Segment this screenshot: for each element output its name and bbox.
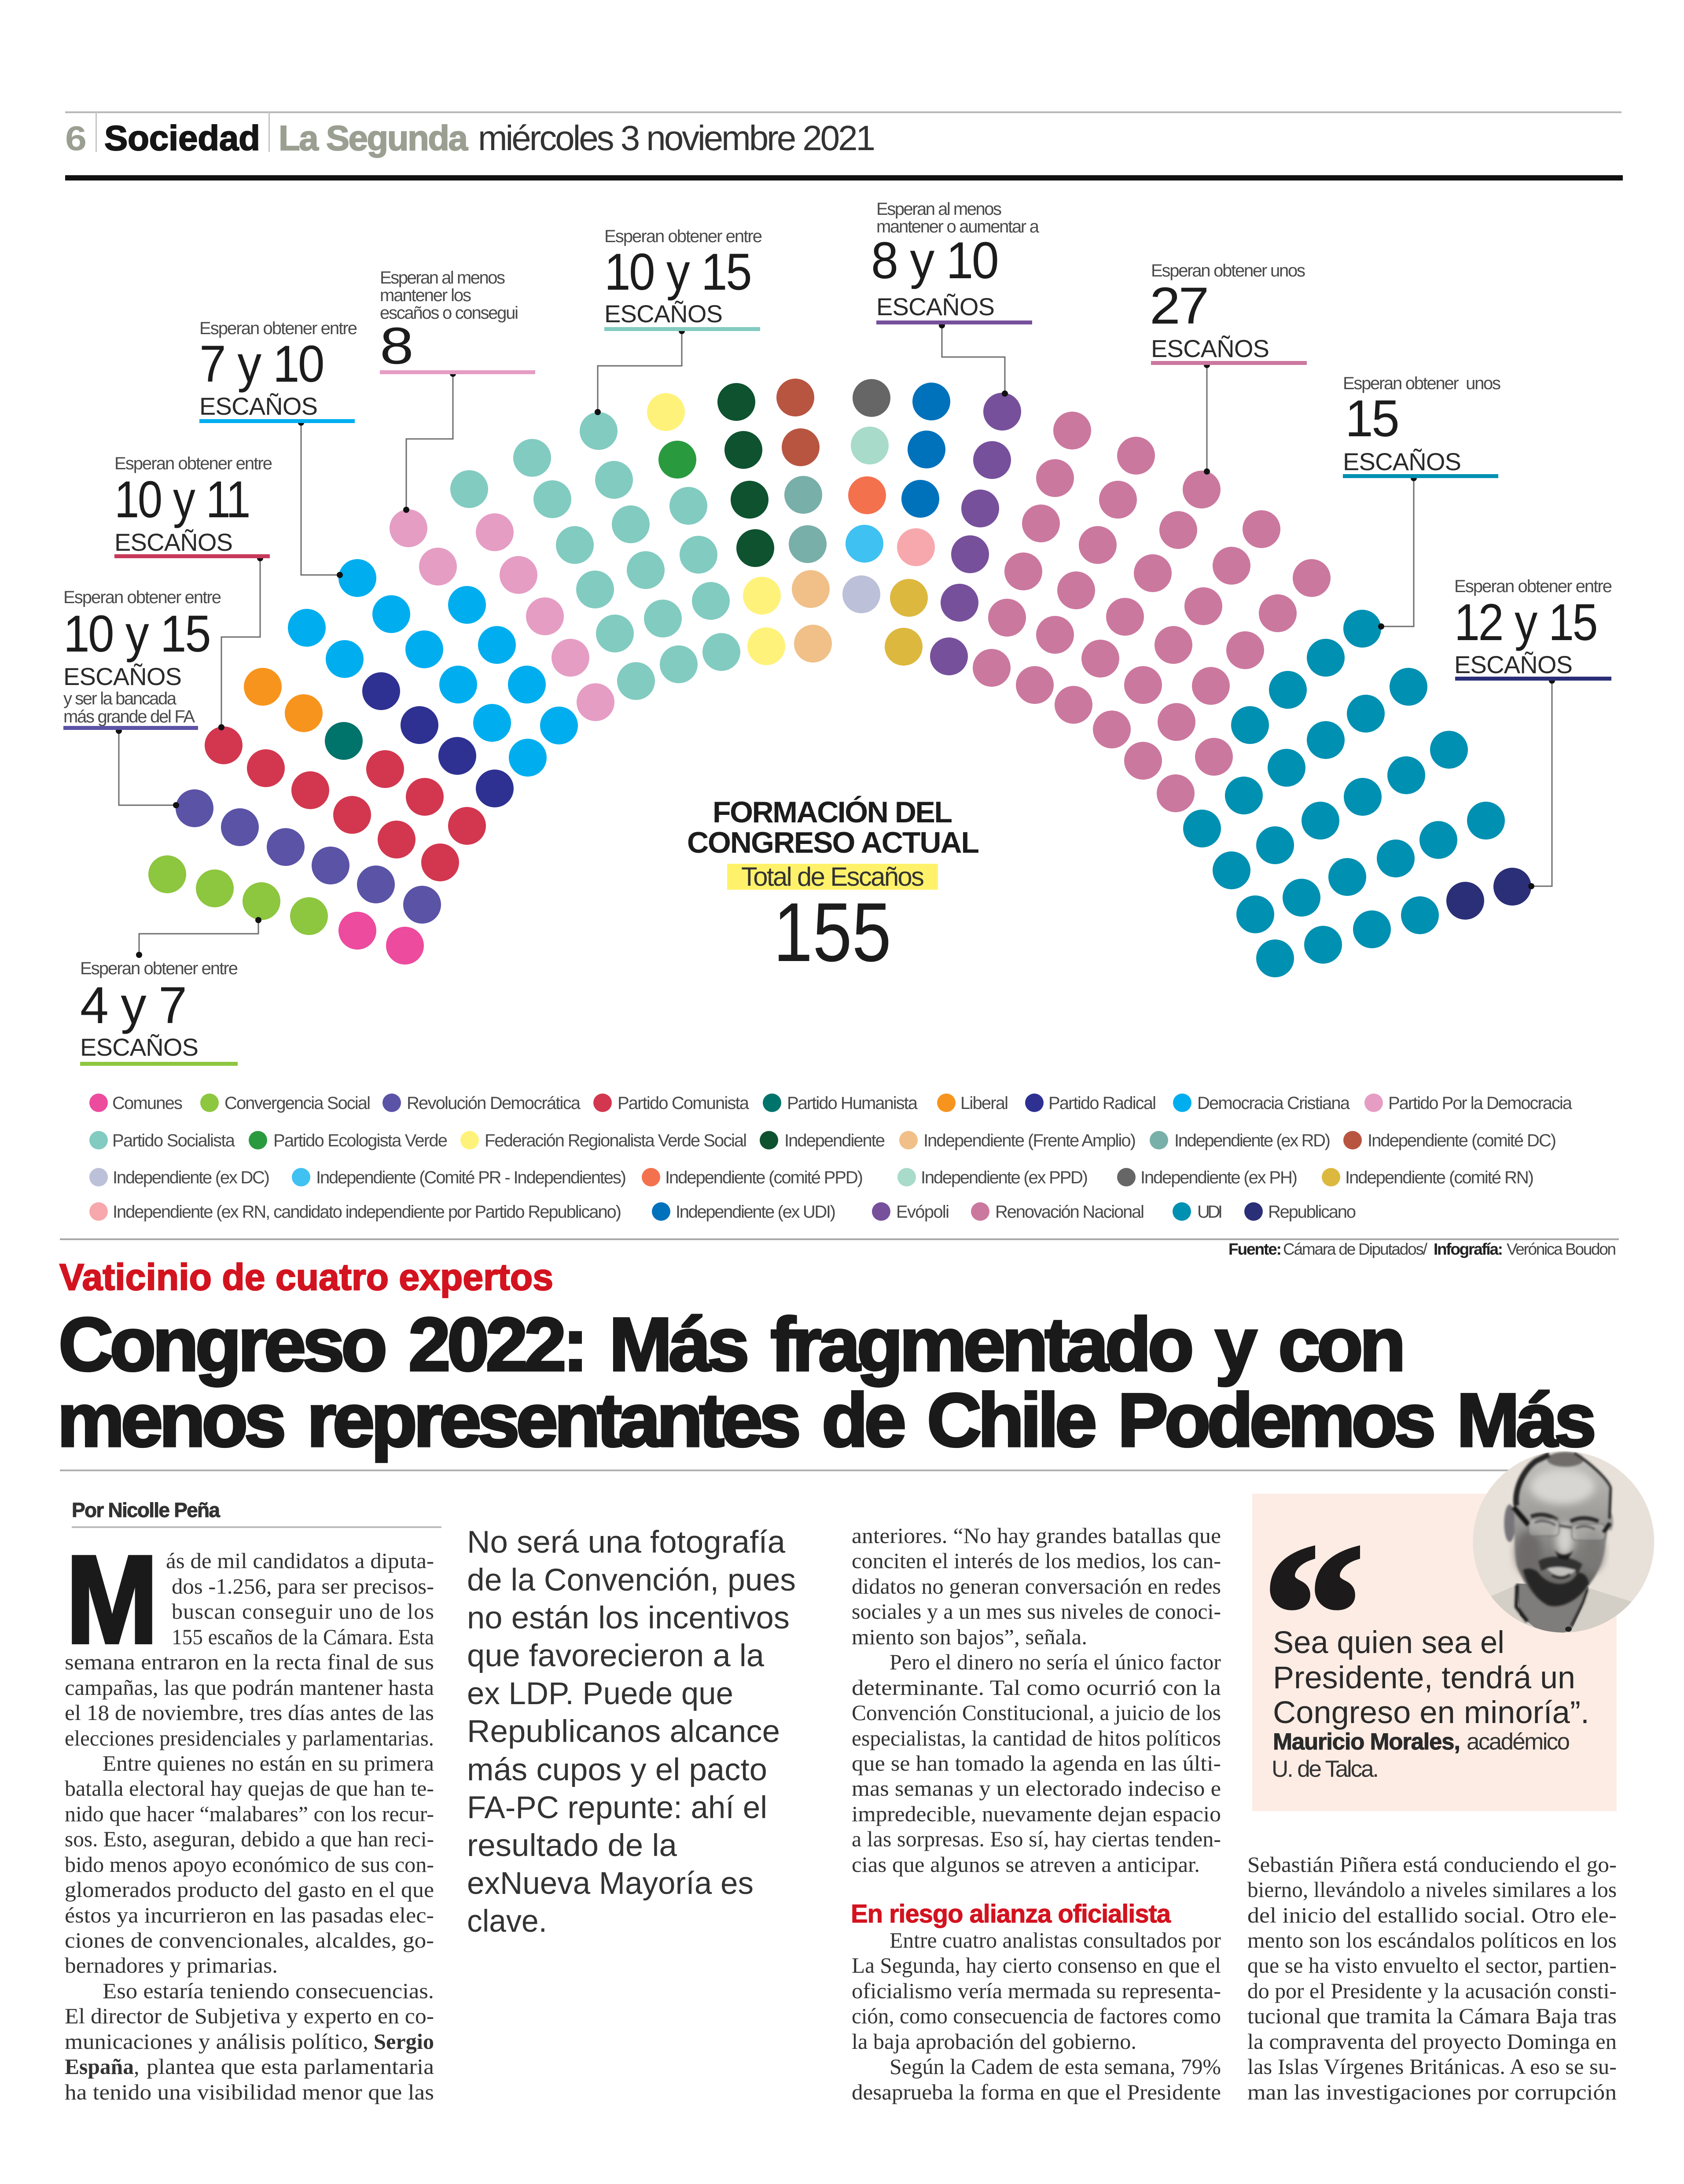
seats: Partido Por la Democracia bbox=[390, 509, 614, 721]
legend row 4: Renovación Nacional bbox=[995, 1202, 1144, 1222]
article column 1: municaciones y análisis político, bbox=[65, 2029, 368, 2054]
legend row 3: Independiente (ex PH) bbox=[1140, 1168, 1298, 1187]
legend row 4 bbox=[89, 1202, 1356, 1222]
article column 1: 155 escaños de la Cámara. Esta bbox=[172, 1624, 434, 1649]
legend row 3 bbox=[89, 1168, 1534, 1187]
seats: Revolución Democrática bbox=[176, 789, 441, 924]
seats: Republicano bbox=[1446, 868, 1531, 920]
seat: Independiente ex RN bbox=[897, 528, 935, 566]
seats: UDI bbox=[1183, 610, 1505, 977]
legend row 1: Convergencia Social bbox=[224, 1094, 371, 1113]
pull quote column: ex LDP. Puede que bbox=[467, 1676, 733, 1711]
callout: PPD 8: mantener los bbox=[380, 286, 471, 305]
seats: Federación Regionalista Verde Social bbox=[647, 393, 785, 665]
article column 1: semana entraron en la recta final de sus bbox=[65, 1650, 434, 1674]
article column 4: la compraventa del proyecto Dominga en bbox=[1247, 2029, 1617, 2054]
article column 3: anteriores. “No hay grandes batallas que bbox=[852, 1523, 1221, 1548]
pull quote column: que favorecieron a la bbox=[467, 1639, 765, 1673]
callout: UDI 15: Esperan obtener unos bbox=[1343, 374, 1501, 393]
legend row 4: Evópoli bbox=[896, 1202, 949, 1222]
pull quote column: exNueva Mayoría es bbox=[467, 1866, 754, 1901]
byline: Por Nicolle Peña bbox=[72, 1499, 220, 1521]
article column 1: sos. Esto, aseguran, debido a que han reci- bbox=[65, 1827, 434, 1851]
legend row 1: Liberal bbox=[960, 1094, 1008, 1113]
byline bbox=[72, 1499, 441, 1528]
seats: Independiente bbox=[717, 383, 774, 567]
article column 1: ciones de convencionales, alcaldes, go- bbox=[65, 1928, 434, 1952]
legend row 2: Independiente (comité DC) bbox=[1368, 1131, 1556, 1150]
article column 1: España bbox=[65, 2054, 134, 2079]
seats: Democracia Cristiana bbox=[288, 559, 578, 777]
page header bbox=[65, 111, 1623, 180]
callout: RN 27: ESCAÑOS bbox=[1151, 335, 1269, 362]
legend row 4: Independiente (ex UDI) bbox=[676, 1202, 836, 1222]
callout: RD 10 y 15: 10 y 15 bbox=[63, 605, 210, 663]
article column 3: impredecible, nuevamente dejan espacio bbox=[852, 1801, 1221, 1826]
legend row 1: Democracia Cristiana bbox=[1197, 1094, 1350, 1113]
drop cap: M bbox=[66, 1530, 158, 1669]
callout: UDI 15: ESCAÑOS bbox=[1343, 448, 1461, 475]
callout: PS 10 y 15: ESCAÑOS bbox=[604, 300, 723, 328]
callout: PS 10 y 15: 10 y 15 bbox=[604, 243, 750, 301]
legend row 4: Republicano bbox=[1268, 1202, 1356, 1222]
callout: PPD 8: Esperan al menos bbox=[380, 268, 505, 287]
pull quote column: Republicanos alcance bbox=[467, 1714, 780, 1749]
page header: La Segunda bbox=[279, 118, 468, 158]
seats: Renovación Nacional bbox=[973, 412, 1331, 812]
callout: Democracia Cristiana 7 y 10: Esperan obtener entre bbox=[199, 319, 357, 338]
callout: Republicano 12 y 15 bbox=[1454, 577, 1612, 681]
source credit: Verónica Boudon bbox=[1507, 1240, 1616, 1258]
article column 3: La Segunda, hay cierto consenso en que el bbox=[852, 1953, 1221, 1978]
hemicycle seat chart bbox=[148, 379, 1531, 977]
headline: Congreso 2022: Más fragmentado y con bbox=[59, 1302, 1406, 1387]
seat: Partido Humanista bbox=[325, 722, 363, 760]
page header: 6 bbox=[65, 119, 87, 158]
pull quote column: FA-PC repunte: ahí el bbox=[467, 1790, 767, 1825]
legend row 1: Partido Radical bbox=[1048, 1094, 1156, 1113]
pull quote column: más cupos y el pacto bbox=[467, 1753, 767, 1787]
callout: PS 10 y 15: Esperan obtener entre bbox=[604, 227, 762, 246]
legend row 3: Independiente (comité PPD) bbox=[665, 1168, 863, 1187]
callout: PS 10 y 15 bbox=[604, 227, 762, 331]
article column 1: glomerados producto del gasto en el que bbox=[65, 1877, 434, 1902]
callout: UDI 15: 15 bbox=[1345, 390, 1398, 448]
article column 3: determinante. Tal como ocurrió con la bbox=[852, 1675, 1221, 1700]
page header: Sociedad bbox=[104, 118, 260, 158]
seats: Independiente ex UDI bbox=[901, 383, 950, 518]
article column 3: a las sorpresas. Eso sí, hay ciertas tenden- bbox=[852, 1827, 1221, 1851]
chart centre title bbox=[687, 796, 979, 979]
article column 3: oficialismo vería mermada su representa- bbox=[852, 1978, 1221, 2003]
quote text: Congreso en minoría”. bbox=[1273, 1695, 1589, 1730]
seat: Independiente comité PPD bbox=[848, 476, 886, 514]
article column 1: nido que hacer “malabares” con los recur- bbox=[65, 1801, 434, 1826]
legend row 1: Partido Humanista bbox=[787, 1094, 918, 1113]
seats: Evópoli bbox=[930, 393, 1021, 675]
article column 4: bierno, llevándolo a niveles similares a los bbox=[1247, 1877, 1617, 1902]
legend row 3: Independiente (ex PPD) bbox=[921, 1168, 1088, 1187]
seat: Independiente ex DC bbox=[842, 575, 880, 613]
callout: PC 10 y 11: Esperan obtener entre bbox=[114, 454, 272, 473]
seats: Partido Comunista bbox=[205, 726, 486, 881]
callout: PPD 8: escaños o consegui bbox=[380, 303, 518, 323]
article column 1: campañas, las que podrán mantener hasta bbox=[65, 1675, 434, 1700]
quote text: Presidente, tendrá un bbox=[1273, 1661, 1575, 1695]
article column 1: batalla electoral hay quejas de que han te- bbox=[65, 1776, 434, 1801]
callout: Democracia Cristiana 7 y 10: 7 y 10 bbox=[199, 335, 323, 393]
seats: Comunes bbox=[338, 912, 424, 965]
article column 3: Convención Constitucional, a juicio de los bbox=[852, 1700, 1221, 1725]
article column 4: las Islas Vírgenes Británicas. A eso se su- bbox=[1247, 2054, 1617, 2079]
article column 1: El director de Subjetiva y experto en co- bbox=[65, 2004, 434, 2028]
legend row 1 bbox=[89, 1094, 1573, 1113]
chart centre title: 155 bbox=[773, 886, 891, 979]
callout: Republicano 12 y 15: 12 y 15 bbox=[1454, 593, 1596, 652]
callout: RD 10 y 15: más grande del FA bbox=[63, 707, 195, 726]
callout: PPD 8 bbox=[380, 268, 535, 375]
callout: RN 27: Esperan obtener unos bbox=[1151, 261, 1305, 280]
article column 1: bernadores y primarias. bbox=[65, 1953, 278, 1978]
callout: PPD 8: 8 bbox=[380, 317, 412, 375]
seat: Independiente Comité PR bbox=[846, 525, 883, 563]
article column 1: , bbox=[134, 2054, 139, 2079]
article column 3: mas semanas y un electorado indeciso e bbox=[852, 1776, 1221, 1801]
legend row 2: Independiente (Frente Amplio) bbox=[923, 1131, 1136, 1150]
legend row 2: Partido Socialista bbox=[112, 1131, 235, 1150]
article column 3 bbox=[851, 1523, 1221, 2104]
callout: Convergencia Social 4 y 7: 4 y 7 bbox=[80, 976, 185, 1035]
article column 1: Eso estaría teniendo consecuencias. bbox=[103, 1978, 434, 2003]
callout: Evópoli 8 y 10: ESCAÑOS bbox=[876, 293, 995, 320]
quote attribution: U. de Talca. bbox=[1272, 1756, 1379, 1782]
article column 3: didatos no generan conversación en redes bbox=[852, 1574, 1221, 1598]
source credit: Infografía: bbox=[1434, 1240, 1503, 1258]
seats: Independiente comité DC bbox=[776, 379, 820, 466]
article column 3: miento son bajos”, señala. bbox=[852, 1624, 1087, 1649]
callout: RD 10 y 15 bbox=[63, 588, 221, 730]
source credit: Fuente: bbox=[1228, 1240, 1282, 1258]
callout: Convergencia Social 4 y 7: Esperan obtener entre bbox=[80, 959, 238, 978]
legend row 1: Partido Por la Democracia bbox=[1388, 1094, 1573, 1113]
pull quote column: no están los incentivos bbox=[467, 1601, 790, 1635]
legend row 2 bbox=[89, 1131, 1556, 1150]
article column 1: elecciones presidenciales y parlamentarias. bbox=[65, 1726, 434, 1750]
chart centre title: Total de Escaños bbox=[741, 862, 924, 891]
chart centre title: CONGRESO ACTUAL bbox=[687, 826, 979, 859]
article column 3: Entre cuatro analistas consultados por bbox=[890, 1928, 1221, 1952]
source credit bbox=[1228, 1240, 1616, 1258]
pull quote column: clave. bbox=[467, 1904, 547, 1939]
seats: Partido Socialista bbox=[450, 412, 740, 700]
seats: Partido Radical bbox=[362, 672, 514, 807]
legend row 3: Independiente (Comité PR - Independientes) bbox=[316, 1168, 626, 1187]
callout: Evópoli 8 y 10: mantener o aumentar a bbox=[876, 217, 1040, 236]
headline: menos representantes de Chile Podemos Más bbox=[57, 1378, 1596, 1462]
article column 4: que se ha visto envuelto el sector, partien- bbox=[1247, 1953, 1617, 1978]
article column 4 bbox=[1247, 1852, 1617, 2104]
callout: RD 10 y 15: ESCAÑOS bbox=[63, 663, 182, 690]
callout: PC 10 y 11: 10 y 11 bbox=[114, 471, 249, 529]
seats: Convergencia Social bbox=[148, 855, 328, 935]
callout: RN 27 bbox=[1150, 261, 1307, 365]
article column 3: Según la Cadem de esta semana, 79% bbox=[890, 2054, 1221, 2079]
seats: Independiente Frente Amplio bbox=[792, 570, 832, 663]
callout: Republicano 12 y 15: Esperan obtener entre bbox=[1454, 577, 1612, 596]
article column 4: Sebastián Piñera está conduciendo el go- bbox=[1247, 1852, 1617, 1877]
legend row 1: Revolución Democrática bbox=[407, 1094, 581, 1113]
quote attribution bbox=[1272, 1729, 1570, 1782]
callout: Democracia Cristiana 7 y 10 bbox=[199, 319, 357, 423]
legend row 3: Independiente (ex DC) bbox=[113, 1168, 270, 1187]
legend row 1: Partido Comunista bbox=[618, 1094, 750, 1113]
seats: Independiente comité RN bbox=[885, 579, 928, 666]
callout: Convergencia Social 4 y 7: ESCAÑOS bbox=[80, 1033, 199, 1061]
quote attribution: académico bbox=[1467, 1729, 1570, 1755]
legend row 2: Partido Ecologista Verde bbox=[273, 1131, 448, 1150]
article column 3: ción, como consecuencia de factores como bbox=[852, 2004, 1221, 2028]
kicker: Vaticinio de cuatro expertos bbox=[59, 1256, 553, 1298]
legend row 3: Independiente (comité RN) bbox=[1345, 1168, 1534, 1187]
seats: Liberal bbox=[244, 668, 323, 732]
article column 1: Entre quienes no están en su primera bbox=[103, 1751, 434, 1775]
quote text: Sea quien sea el bbox=[1273, 1625, 1504, 1660]
callout: Convergencia Social 4 y 7 bbox=[80, 959, 238, 1066]
source credit: Cámara de Diputados/ bbox=[1283, 1240, 1428, 1258]
article column 1: bido menos apoyo económico de sus con- bbox=[65, 1852, 434, 1877]
article column 3: la baja aprobación del gobierno. bbox=[852, 2029, 1136, 2054]
article column 3: sociales y a un mes sus niveles de conoci- bbox=[852, 1599, 1221, 1624]
callout: Evópoli 8 y 10: Esperan al menos bbox=[876, 199, 1002, 219]
callout: Democracia Cristiana 7 y 10: ESCAÑOS bbox=[199, 392, 318, 420]
icon: quotation mark: “ bbox=[1262, 1504, 1364, 1723]
callout: RD 10 y 15: Esperan obtener entre bbox=[63, 588, 221, 607]
article column 4: tucional que tramita la Cámara Baja tras bbox=[1247, 2004, 1617, 2028]
article column 1: ha tenido una visibilidad menor que las bbox=[65, 2080, 434, 2104]
subheading: En riesgo alianza oficialista bbox=[851, 1900, 1171, 1928]
pull quote column bbox=[467, 1525, 796, 1939]
panel: quote box bbox=[1252, 1494, 1617, 1811]
callout: UDI 15 bbox=[1343, 374, 1501, 478]
article column 4: do por el Presidente y la acusación consti- bbox=[1247, 1978, 1617, 2003]
article column 3: Pero el dinero no sería el único factor bbox=[890, 1650, 1221, 1674]
article column 1: buscan conseguir uno de los bbox=[172, 1599, 434, 1624]
pull quote column: No será una fotografía bbox=[467, 1525, 786, 1560]
legend row 2: Federación Regionalista Verde Social bbox=[485, 1131, 747, 1150]
seats: Independiente ex RD bbox=[784, 476, 827, 563]
legend row 4: UDI bbox=[1197, 1202, 1223, 1222]
callout: RD 10 y 15: y ser la bancada bbox=[63, 689, 177, 708]
article column 3: especialistas, la cantidad de hitos políticos bbox=[852, 1726, 1221, 1750]
callout: Republicano 12 y 15: ESCAÑOS bbox=[1454, 651, 1573, 678]
article column 4: mento son los escándalos políticos en los bbox=[1247, 1928, 1617, 1952]
article column 1: dos -1.256, para ser precisos- bbox=[172, 1574, 434, 1598]
article column 1: ás de mil candidatos a diputa- bbox=[166, 1548, 434, 1573]
chart centre title: FORMACIÓN DEL bbox=[713, 796, 952, 829]
pull quote column: resultado de la bbox=[467, 1828, 677, 1863]
callout: Evópoli 8 y 10 bbox=[871, 199, 1040, 324]
pull quote column: de la Convención, pues bbox=[467, 1563, 796, 1598]
seat: Independiente ex PH bbox=[853, 379, 890, 417]
legend row 4: Independiente (ex RN, candidato independiente por Partido Republicano) bbox=[113, 1202, 621, 1222]
article column 4: del inicio del estallido social. Otro ele- bbox=[1247, 1903, 1617, 1927]
article column 1: plantea que esta parlamentaria bbox=[147, 2054, 434, 2079]
page header: miércoles 3 noviembre 2021 bbox=[478, 118, 875, 158]
headline bbox=[57, 1302, 1596, 1462]
article column 1: el 18 de noviembre, tres días antes de las bbox=[65, 1700, 434, 1725]
callout: RN 27: 27 bbox=[1150, 277, 1207, 335]
seat: Partido Ecologista Verde bbox=[658, 441, 696, 479]
callout: PC 10 y 11 bbox=[114, 454, 272, 558]
article column 1: Sergio bbox=[374, 2029, 434, 2054]
article column 3: cias que algunos se atreven a anticipar. bbox=[852, 1852, 1200, 1877]
quote attribution: Mauricio Morales, bbox=[1273, 1729, 1460, 1755]
connector end dots bbox=[116, 322, 1555, 958]
callout: Evópoli 8 y 10: 8 y 10 bbox=[871, 232, 997, 290]
article column 3: desaprueba la forma en que el Presidente bbox=[852, 2080, 1221, 2104]
callout: PC 10 y 11: ESCAÑOS bbox=[114, 528, 233, 556]
legend row 1: Comunes bbox=[112, 1094, 183, 1113]
quote text bbox=[1273, 1625, 1589, 1730]
connector lines bbox=[119, 325, 1552, 955]
legend row 2: Independiente (ex RD) bbox=[1174, 1131, 1331, 1150]
article column 1: éstos ya incurrieron en las pasadas elec- bbox=[65, 1903, 434, 1927]
legend row 2: Independiente bbox=[784, 1131, 885, 1150]
article column 3: conciten el interés de los medios, los can- bbox=[852, 1548, 1221, 1573]
legend bbox=[89, 1094, 1573, 1222]
portrait photo: Mauricio Morales bbox=[1473, 1451, 1654, 1638]
article column 4: man las investigaciones por corrupción bbox=[1247, 2080, 1617, 2104]
seat: Independiente ex PPD bbox=[851, 427, 889, 464]
article column 1 bbox=[65, 1548, 434, 2104]
article column 3: que se han tomado la agenda en las últi- bbox=[852, 1751, 1221, 1775]
